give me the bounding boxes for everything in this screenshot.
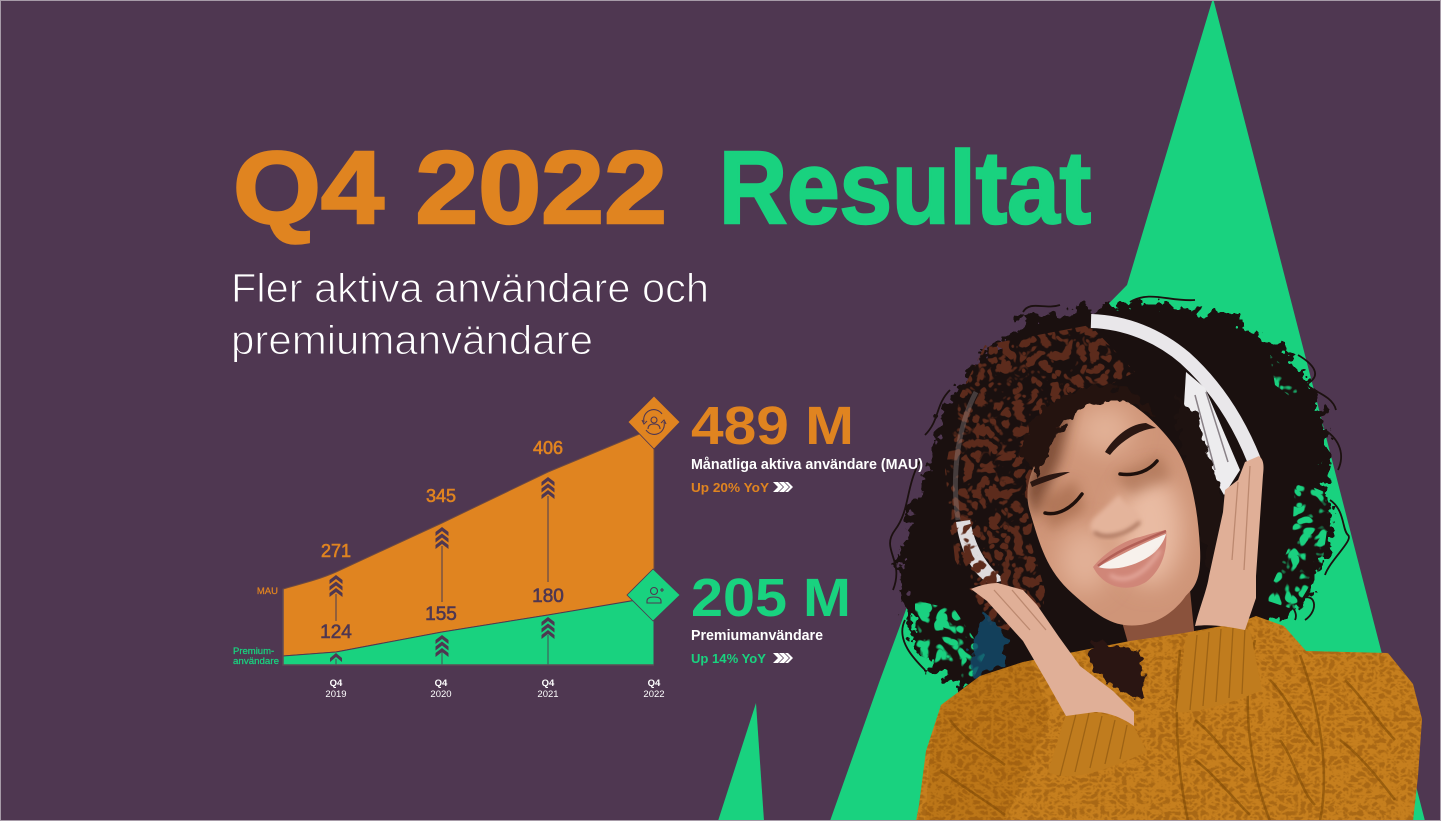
- x axis labels: 2022: [643, 689, 665, 700]
- area chart: [233, 428, 665, 700]
- MAU area: [283, 428, 654, 656]
- stat: monthly active users: Up 20% YoY: [691, 480, 769, 495]
- stat: monthly active users: 489 M: [691, 396, 854, 456]
- nose: [1090, 495, 1141, 538]
- x axis labels: 2020: [430, 689, 452, 700]
- x axis labels: 2019: [325, 689, 347, 700]
- stat: premium users: [691, 568, 851, 666]
- x axis labels: Q4: [435, 678, 448, 689]
- small green triangle: [718, 703, 764, 821]
- subtitle: Fler aktiva användare och: [231, 265, 709, 311]
- series labels: [233, 586, 279, 667]
- MAU values: [321, 438, 563, 561]
- sleeve cuffs: [1176, 628, 1262, 712]
- sweater: [916, 610, 1426, 821]
- curls: [890, 297, 1349, 670]
- hair over headphones: [1178, 395, 1230, 590]
- blue shadow in hair: [970, 610, 1010, 680]
- growth arrows: [330, 477, 554, 665]
- premium values: 180: [532, 586, 564, 607]
- green tinted curls: [1265, 355, 1332, 610]
- premium area: [283, 597, 654, 665]
- headphones: [955, 321, 1254, 584]
- closed eyes: [1045, 461, 1157, 514]
- title: [233, 130, 1091, 245]
- icon: white chevrons: [773, 653, 793, 663]
- MAU values: 406: [533, 438, 563, 458]
- x axis labels: [325, 678, 665, 700]
- stat: premium users: Up 14% YoY: [691, 651, 766, 666]
- neck: [1120, 590, 1195, 650]
- hair strands over the forehead: [1020, 385, 1158, 478]
- series labels: Premium-: [233, 646, 274, 657]
- icon: premium diamond: [627, 569, 680, 621]
- face: [1020, 385, 1200, 626]
- title: Resultat: [719, 130, 1091, 245]
- hair over the collar: [1090, 640, 1146, 700]
- icon: MAU diamond: [628, 396, 680, 449]
- stat: monthly active users: [691, 396, 923, 495]
- series labels: MAU: [257, 586, 278, 597]
- left hand: [971, 583, 1134, 726]
- icon: white chevrons: [773, 482, 793, 492]
- mouth: [1093, 530, 1166, 588]
- subtitle: [231, 265, 709, 363]
- series labels: användare: [233, 656, 279, 667]
- finger lines: [994, 466, 1250, 630]
- title: Q4 2022: [233, 130, 667, 245]
- subtitle: premiumanvändare: [231, 317, 593, 363]
- hair highlights: [945, 325, 1135, 640]
- right hand: [1195, 456, 1264, 630]
- eyebrows: [1030, 472, 1070, 487]
- stat: premium users: Premiumanvändare: [691, 628, 823, 644]
- x axis labels: 2021: [537, 689, 559, 700]
- cable knit braids: [940, 640, 1395, 821]
- stat: monthly active users: Månatliga aktiva användare (MAU): [691, 457, 923, 473]
- x axis labels: Q4: [330, 678, 343, 689]
- x axis labels: Q4: [542, 678, 555, 689]
- premium values: 155: [425, 604, 457, 625]
- hair: [890, 297, 1349, 700]
- MAU values: 345: [426, 486, 456, 506]
- big green triangle: [830, 0, 1425, 821]
- photo: woman with headphones: [890, 297, 1426, 821]
- x axis labels: Q4: [648, 678, 661, 689]
- stat: premium users: 205 M: [691, 568, 851, 628]
- premium values: 124: [320, 622, 352, 643]
- premium values: [320, 586, 564, 643]
- MAU values: 271: [321, 541, 351, 561]
